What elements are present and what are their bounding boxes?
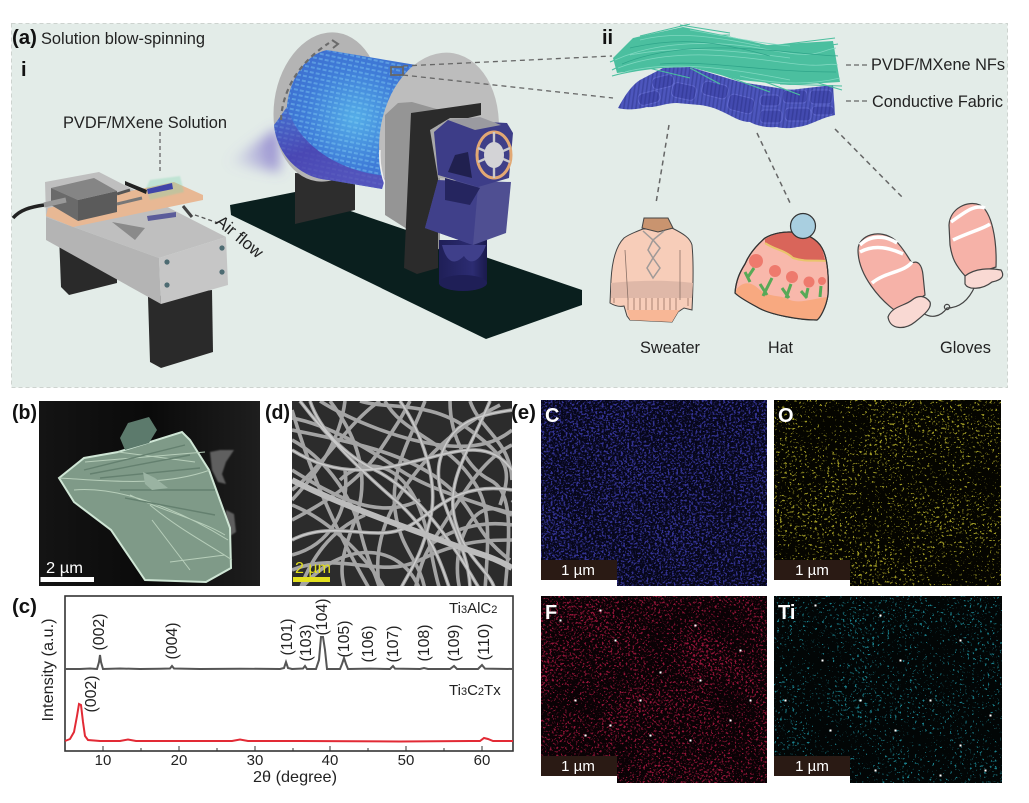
panel c: XRD chart [40,596,513,786]
conductive fabric layer [618,67,835,128]
panel e: EDS map titanium: Ti [778,602,795,624]
icon: gloves [858,204,1003,327]
x axis tick labels: 10 [95,752,111,769]
x axis tick labels: 50 [398,752,414,769]
label: panel d: (d) [265,402,290,424]
label: ii: ii [602,27,613,49]
rotating drum collector [264,25,512,229]
peak labels: (002) [91,614,108,650]
dashed leader: solution [159,132,161,174]
label: sweater: Sweater [640,338,700,357]
blow-spinning stage [13,172,228,368]
label: i: i [21,59,27,81]
dashed leader: gloves [835,129,904,199]
series label: Ti3C2Tx: Ti3C2Tx [449,682,501,699]
peak labels: (103) [298,624,315,662]
x axis tick labels [95,752,490,769]
label: conductive fabric: Conductive Fabric [872,92,1003,111]
panel e: EDS map carbon [541,400,767,586]
peak labels: (002) [83,676,100,712]
label: hat: Hat [768,338,793,357]
scale bar: 2 µm: 2 µm [46,560,83,577]
y axis label: Intensity (a.u.) [40,618,57,722]
heading: solution blow-spinning: Solution blow-spinning [41,29,205,48]
peak labels: (110) [476,624,493,660]
collector base [230,192,582,339]
label: PVDF/MXene NFs: PVDF/MXene NFs [871,55,1005,74]
dashed leader: to nanofibers [403,56,612,66]
trace: Ti3AlC2 [65,637,513,669]
panel e: EDS map fluorine: 1 µm [561,758,595,775]
x axis tick labels: 40 [322,752,338,769]
arrow: air flow leader [195,215,218,223]
panel e: EDS map carbon: 1 µm [561,562,595,579]
peak labels: (106) [360,626,377,662]
panel e: EDS map titanium [774,596,1002,783]
panel b: SEM image of MAX phase particle [39,401,260,586]
panel e: EDS map oxygen [774,400,1001,586]
heading: panel a: (a) [12,27,37,49]
peak labels: (101) [279,618,296,656]
dashed leader: to fabric [403,75,613,98]
panel e: EDS map oxygen: O [778,405,794,427]
dashed leader: hat [757,133,791,205]
label: panel e: (e) [511,402,536,424]
label: air flow: Air flow [212,212,268,262]
panel d: SEM image of nanofibers [292,401,517,590]
scale bar: 2 µm [40,560,94,582]
icon: hat [735,214,828,320]
peak labels: (104) [314,598,331,636]
peak labels: (004) [164,622,181,660]
label: panel b: (b) [12,402,37,424]
series label: Ti3AlC2: Ti3AlC2 [449,600,497,617]
panel e: EDS map fluorine: F [545,602,557,624]
panel e: EDS map titanium: 1 µm [795,758,829,775]
motor assembly [385,102,513,291]
label: panel c: (c) [12,596,37,618]
label: PVDF/MXene solution: PVDF/MXene Solution [63,113,227,132]
x axis tick labels: 30 [247,752,263,769]
PVDF/MXene nanofiber layer [610,24,842,95]
purple spray plume [226,128,280,172]
peak labels: (108) [416,624,433,662]
panel e: EDS map fluorine [541,596,767,783]
x axis tick labels: 20 [171,752,187,769]
collector stand [295,173,355,224]
axis ticks [103,746,482,751]
scale bar: 2 µm yellow [293,562,330,582]
peak labels: (109) [446,624,463,662]
panel e: EDS map carbon: C [545,405,559,427]
panel e: EDS map oxygen: 1 µm [795,562,829,579]
scale bar: 2 µm yellow: 2 µm [295,560,331,577]
panel a: solution blow-spinning schematic [12,24,1008,388]
x axis title: 2θ (degree) [253,769,337,786]
trace: Ti3C2Tx [65,704,513,742]
dashed leader: sweater [656,125,669,203]
peak labels: (105) [336,620,353,658]
peak labels [83,598,493,712]
label: gloves: Gloves [940,338,991,357]
icon: sweater [610,218,693,322]
peak labels: (107) [385,626,402,662]
x axis tick labels: 60 [474,752,490,769]
